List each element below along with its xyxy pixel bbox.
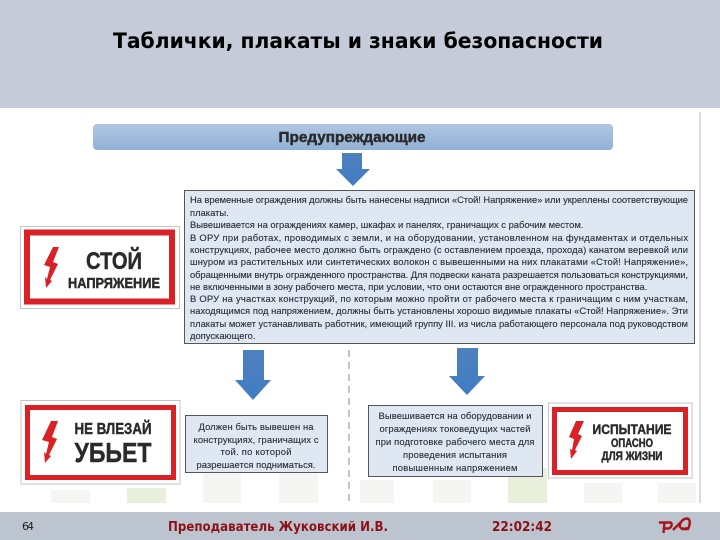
right edge line xyxy=(699,112,701,503)
panel: right note: ограждениях токоведущих частей xyxy=(380,423,530,434)
banner: Предупреждающие xyxy=(93,124,613,150)
icon: lightning bolt xyxy=(44,247,59,288)
icon: lightning bolt xyxy=(42,421,58,463)
banner: Предупреждающие: Предупреждающие xyxy=(278,130,426,146)
sign: СТОЙ НАПРЯЖЕНИЕ xyxy=(20,226,180,308)
panel: right note: Вывешивается на оборудовании и xyxy=(378,410,532,421)
panel: left note: разрешается подниматься. xyxy=(196,459,316,470)
dashed divider xyxy=(348,350,350,503)
panel: right note xyxy=(368,406,542,476)
panel: main text: Вывешивается на ограждениях камер, шкафах и панелях, граничащих с рабочим местом. xyxy=(190,219,583,230)
panel: right note: проведения испытания xyxy=(403,449,507,460)
panel: main text: плакаты может устанавливать работник, имеющий группу III. из числа работающего персонала под руководством xyxy=(190,318,688,329)
panel: main text: не включенными в зону рабочего места, при условии, что они остаются вне огражденного пространства. xyxy=(190,281,647,292)
sign: СТОЙ НАПРЯЖЕНИЕ: СТОЙ xyxy=(86,247,142,275)
panel: left note xyxy=(186,416,328,472)
panel: main text: конструкциях, рабочее место должно быть ограждено (с оставлением проезда, прохода) канатом веревкой или xyxy=(190,244,688,255)
footer time: 22:02:42 xyxy=(492,520,552,535)
icon: railway logo xyxy=(659,518,690,533)
content area xyxy=(20,112,701,503)
panel: main text: находящимся под напряжением, должны быть установлены хорошо видимые плакаты «Стой! Напряжение». Эти xyxy=(190,305,688,316)
sign: ИСПЫТАНИЕ ОПАСНО ДЛЯ ЖИЗНИ: ИСПЫТАНИЕ xyxy=(592,421,672,437)
panel: main text: шнуром из растительных или синтетических волокон с вывешенными на них плакатами «Стой! Напряжение», xyxy=(190,256,688,267)
sign: СТОЙ НАПРЯЖЕНИЕ: НАПРЯЖЕНИЕ xyxy=(68,276,160,292)
arrow: banner to main box xyxy=(336,153,370,186)
panel: left note: конструкциях, граничащих с xyxy=(194,434,319,445)
arrow: right down xyxy=(449,348,485,395)
sign: ИСПЫТАНИЕ ОПАСНО ДЛЯ ЖИЗНИ xyxy=(548,403,692,478)
panel: left note: Должен быть вывешен на xyxy=(198,421,314,432)
panel: main text: обращенными внутрь огражденного пространства. Для подвески каната разрешается пользоваться конструкциями, xyxy=(190,269,688,280)
panel: main text: В ОРУ на участках конструкций, по которым можно пройти от рабочего места к граничащим с ним участкам, xyxy=(190,293,688,304)
panel: main text: допускающего. xyxy=(190,330,255,341)
sign: ИСПЫТАНИЕ ОПАСНО ДЛЯ ЖИЗНИ: ДЛЯ ЖИЗНИ xyxy=(602,451,662,463)
title: Таблички, плакаты и знаки безопасности xyxy=(113,29,603,53)
sign: НЕ ВЛЕЗАЙ УБЬЕТ: НЕ ВЛЕЗАЙ xyxy=(74,419,152,438)
sign: ИСПЫТАНИЕ ОПАСНО ДЛЯ ЖИЗНИ: ОПАСНО xyxy=(611,438,653,450)
panel: main text: плакаты. xyxy=(190,207,229,218)
faint background squares xyxy=(51,468,696,503)
icon: lightning bolt xyxy=(569,421,584,459)
footer presenter: Преподаватель Жуковский И.В. xyxy=(168,520,388,535)
panel: left note: той. по которой xyxy=(220,446,292,457)
arrow: left down xyxy=(235,350,271,400)
header band xyxy=(0,0,720,108)
panel: main text: В ОРУ при работах, проводимых с земли, и на оборудовании, установленном на фундаментах и отдельных xyxy=(190,232,688,243)
sign: НЕ ВЛЕЗАЙ УБЬЕТ: УБЬЕТ xyxy=(74,437,152,468)
footer band xyxy=(0,512,720,540)
panel: main text xyxy=(184,190,694,344)
panel: right note: при подготовке рабочего места для xyxy=(376,436,534,447)
panel: right note: повышенным напряжением xyxy=(392,462,518,473)
sign: НЕ ВЛЕЗАЙ УБЬЕТ xyxy=(21,400,180,484)
page number: 64 xyxy=(22,520,34,533)
panel: main text: На временные ограждения должны быть нанесены надписи «Стой! Напряжение» или укреплены соответствующие xyxy=(190,194,688,205)
